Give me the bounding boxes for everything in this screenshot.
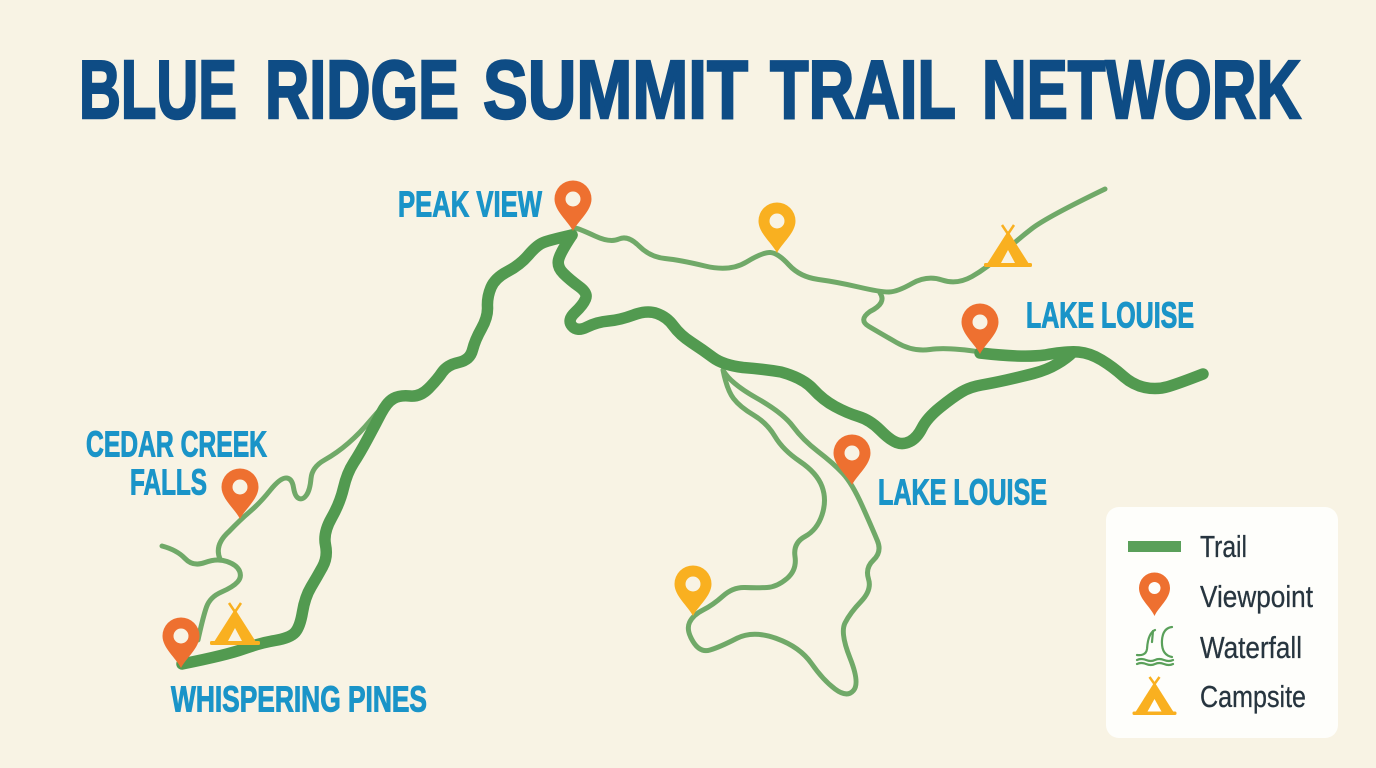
legend: trail swatch [1128, 541, 1181, 552]
legend: waterfall icon [1137, 627, 1173, 665]
pin: cedar creek falls viewpoint [222, 468, 258, 519]
trail map [162, 189, 1203, 694]
title: SUMMIT [483, 43, 748, 136]
pin: peak view viewpoint [554, 180, 592, 231]
legend: campsite text: Campsite [1200, 679, 1306, 714]
label: southern lake louise: LAKE LOUISE [878, 472, 1047, 512]
thick trail: eastern descent [558, 235, 1073, 444]
thin trail: northeast spur [575, 189, 1105, 292]
legend: viewpoint icon [1139, 572, 1170, 616]
thin trail: western spur [162, 546, 240, 640]
legend: viewpoint text: Viewpoint [1200, 579, 1313, 614]
thin trail: lake connector [864, 293, 980, 352]
campsite icon: northeast spur [984, 225, 1032, 267]
pin: yellow marker on northeast spur [758, 202, 796, 253]
pin: southern lake louise viewpoint [834, 434, 870, 485]
title [79, 43, 1301, 136]
pin: northern lake louise viewpoint [962, 304, 998, 354]
thick trail: western ascent [182, 235, 572, 664]
label: cedar creek falls [86, 424, 267, 502]
legend: waterfall text: Waterfall [1200, 630, 1302, 665]
title: RIDGE [265, 43, 459, 136]
label: cedar creek falls: CEDAR CREEK [86, 424, 267, 464]
thin trail: cedar creek connector [218, 397, 393, 559]
label: whispering pines: WHISPERING PINES [171, 678, 427, 720]
legend: trail text: Trail [1200, 529, 1247, 564]
pin: whispering pines viewpoint [162, 618, 200, 668]
label: peak view: PEAK VIEW [398, 184, 542, 224]
label: northern lake louise: LAKE LOUISE [1026, 294, 1194, 336]
thin trail: southern loop [688, 370, 879, 694]
thick trail: lake louise stretch [980, 352, 1203, 389]
campsite icon: whispering pines [210, 603, 260, 645]
title: TRAIL [770, 43, 956, 136]
legend panel [1106, 507, 1338, 738]
label: cedar creek falls: FALLS [130, 462, 207, 502]
legend: campsite icon [1132, 677, 1176, 715]
pin: yellow marker on southern loop [674, 566, 712, 616]
title: BLUE [79, 43, 237, 136]
